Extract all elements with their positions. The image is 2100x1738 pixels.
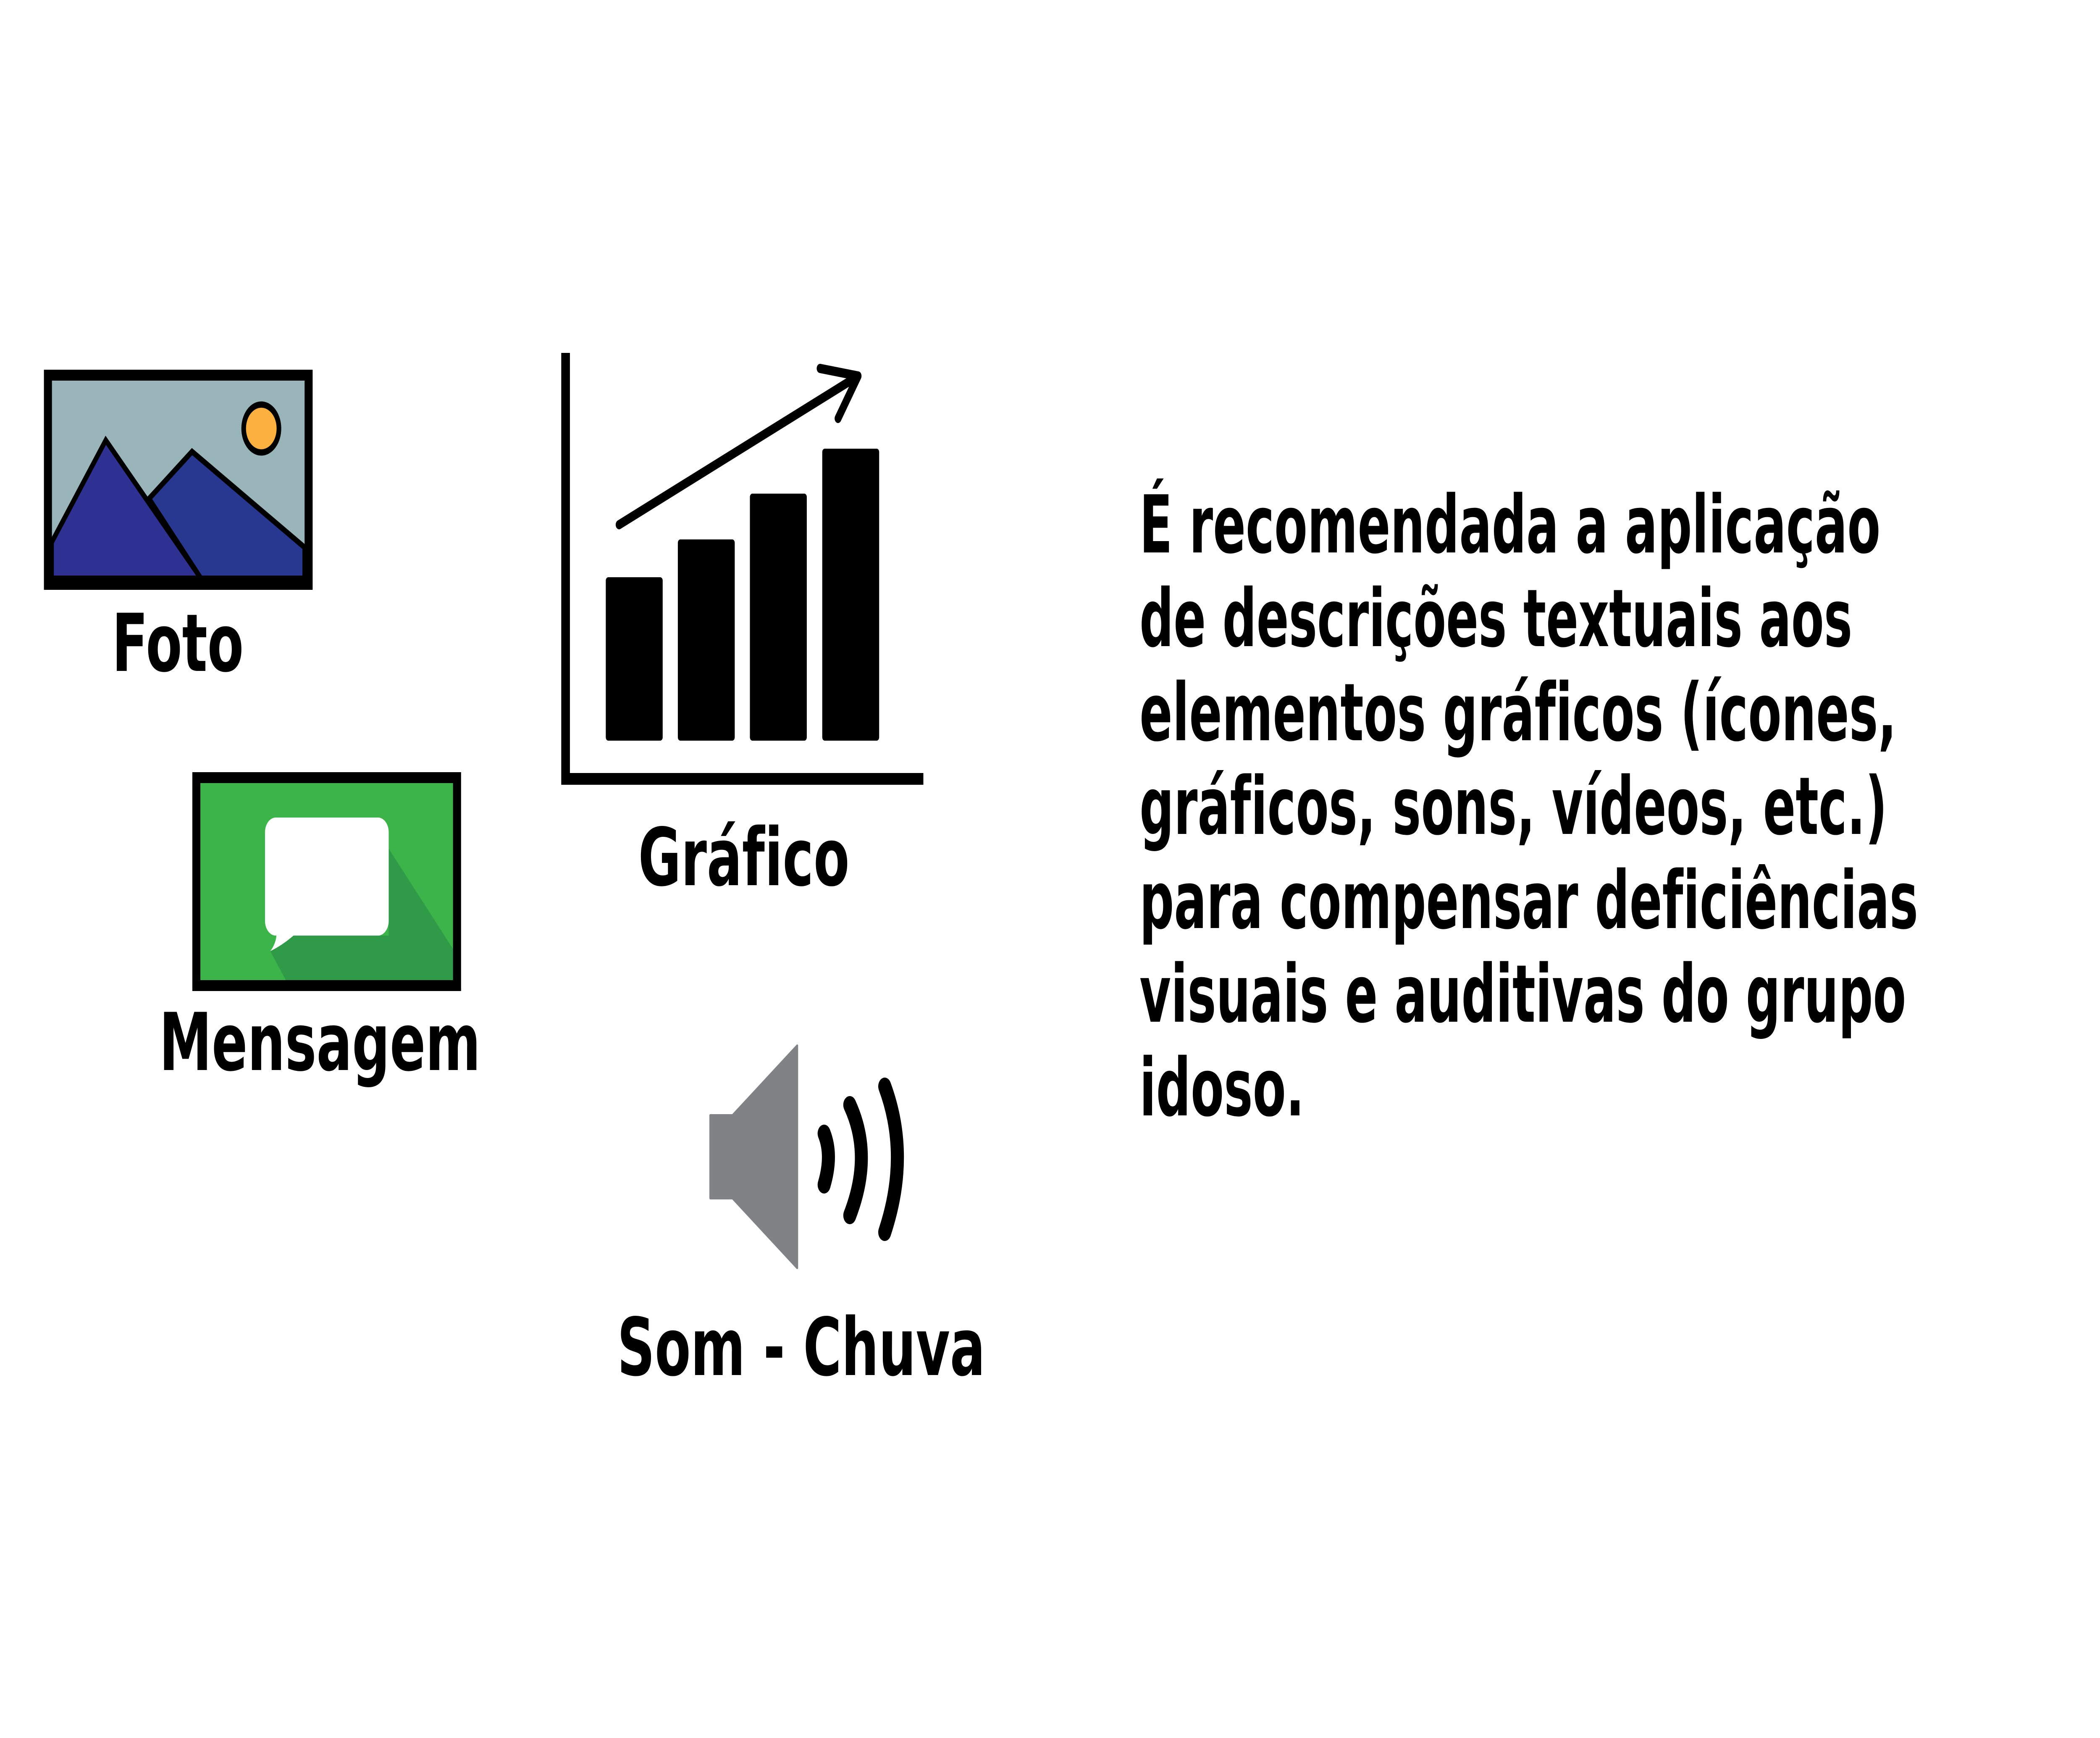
sound waves <box>824 1086 898 1232</box>
text block: recommendation: É recomendada a aplicação <box>1139 478 1880 572</box>
bar 1 <box>606 577 663 741</box>
text block: recommendation: elementos gráficos (ícones, <box>1139 667 1897 760</box>
label: Gráfico: Gráfico <box>638 812 850 904</box>
text block: recommendation: gráficos, sons, vídeos, etc.) <box>1139 760 1887 853</box>
label: Foto: Foto <box>112 597 244 690</box>
bar 2 <box>678 539 735 741</box>
icon: speaker <box>710 1046 898 1268</box>
label: Som - Chuva: Som - Chuva <box>617 1302 985 1394</box>
icon: photo <box>48 375 309 584</box>
text block: recommendation: idoso. <box>1139 1042 1305 1135</box>
icon: message <box>197 778 457 986</box>
speaker body <box>710 1046 797 1268</box>
bar 4 <box>822 449 879 741</box>
label: Mensagem: Mensagem <box>159 997 480 1089</box>
text block: recommendation: visuais e auditivas do grupo <box>1139 948 1906 1041</box>
text block: recommendation: para compensar deficiências <box>1139 855 1918 947</box>
chart axes <box>566 353 923 779</box>
chart icon: rising bars <box>566 353 923 779</box>
text block: recommendation <box>1139 478 1918 1135</box>
arrow <box>619 368 858 525</box>
text block: recommendation: de descrições textuais aos <box>1139 573 1852 665</box>
bar 3 <box>750 494 807 741</box>
